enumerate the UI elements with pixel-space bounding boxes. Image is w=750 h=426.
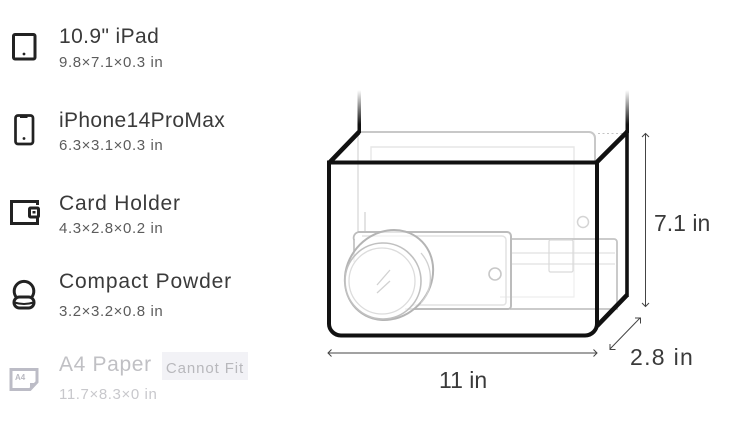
strap left: [358, 90, 361, 133]
dimension: depth arrow: [610, 318, 640, 350]
label: height: 7.1 in: [654, 210, 710, 236]
strap right: [626, 90, 629, 133]
list item: A4 Paper: [59, 352, 248, 403]
tablet outline: [358, 132, 595, 297]
dimension: width arrow: [328, 350, 597, 356]
list item: iPad: [59, 25, 163, 71]
dimensions: iPhone: 6.3×3.1×0.3 in: [59, 137, 163, 154]
heading: iPad: 10.9" iPad: [59, 25, 159, 48]
card holder: [510, 239, 617, 309]
icon: A4 sheet: [11, 370, 37, 390]
badge: Cannot Fit: [162, 352, 248, 380]
front face: [329, 162, 597, 336]
dimension: height arrow: [642, 134, 649, 306]
list item: Compact Powder: [59, 270, 232, 320]
phone: [354, 232, 511, 309]
heading: iPhone: iPhone14ProMax: [59, 109, 225, 132]
illustration: items inside pouch: [327, 132, 624, 338]
dimensions: iPad: 9.8×7.1×0.3 in: [59, 54, 163, 71]
icon: tablet: [14, 34, 35, 59]
heading: Card Holder: Card Holder: [59, 192, 181, 215]
icon: A4 sheet: A4: [15, 373, 26, 382]
dimensions: Compact Powder: 3.2×3.2×0.8 in: [59, 303, 163, 320]
pouch wireframe: [329, 90, 629, 336]
list item: Card Holder: [59, 192, 181, 237]
back edges: [330, 132, 359, 162]
icon: wallet: [12, 202, 38, 224]
badge: Cannot Fit: Cannot Fit: [166, 360, 244, 377]
icon: compact powder: [14, 281, 34, 308]
label: width: 11 in: [439, 367, 487, 393]
compact powder: [327, 212, 451, 338]
label: depth: 2.8 in: [630, 344, 694, 370]
heading: Compact Powder: Compact Powder: [59, 270, 232, 293]
dimensions: A4 Paper: 11.7×8.3×0 in: [59, 386, 157, 403]
dimensions: Card Holder: 4.3×2.8×0.2 in: [59, 220, 163, 237]
heading: A4 Paper: A4 Paper: [59, 353, 152, 376]
dotted line top right: [598, 132, 624, 134]
icon: phone: [16, 116, 33, 144]
list item: iPhone: [59, 109, 225, 154]
